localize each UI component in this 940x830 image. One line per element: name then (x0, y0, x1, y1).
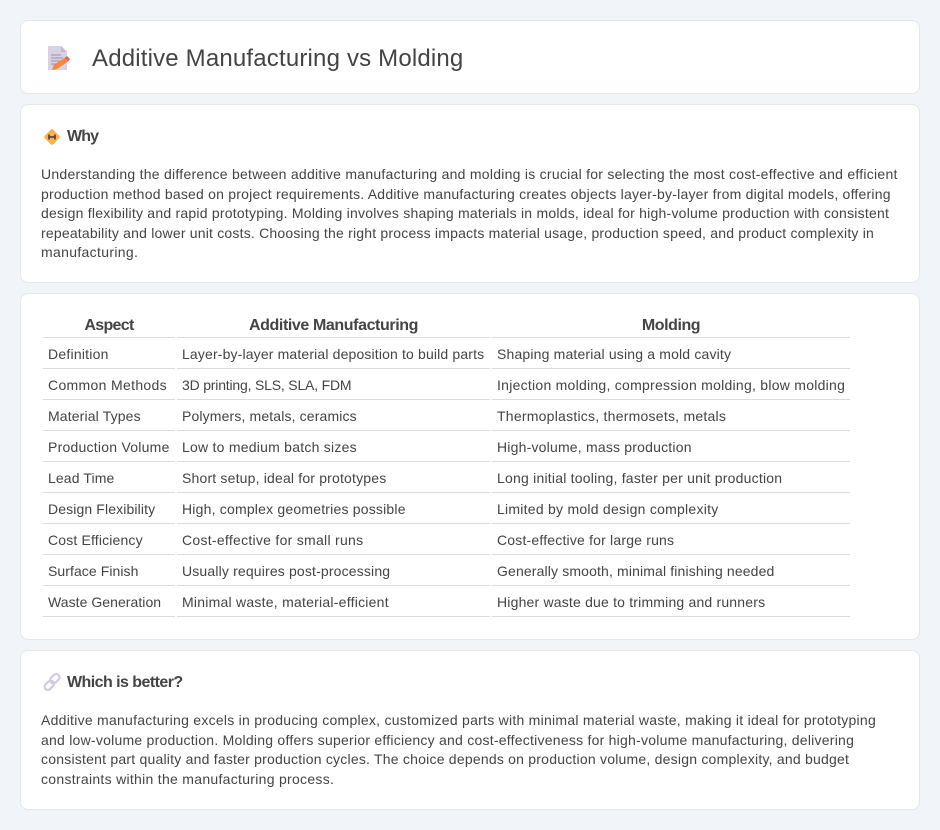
text block: why: design flexibility and rapid prototyping. Molding involves shaping materials in molds, ideal for high-volume production with consistent (41, 205, 889, 221)
comparison table: Surface Finish (48, 563, 138, 579)
title: Additive Manufacturing vs Molding (92, 45, 463, 72)
text block: why: repeatability and lower unit costs. Choosing the right process impacts material usage, production speed, and product complexity in (41, 225, 874, 241)
icon: chain link (44, 673, 60, 691)
text block: why: manufacturing. (41, 244, 138, 260)
comparison table: Design Flexibility (48, 501, 155, 517)
comparison table: Definition (48, 346, 109, 362)
comparison table: Production Volume (48, 439, 170, 455)
text block: why: Understanding the difference between additive manufacturing and molding is crucial for selecting the most cost-effective and efficient (41, 166, 898, 182)
icon: document with pencil (48, 46, 70, 70)
comparison table: Low to medium batch sizes (182, 439, 357, 455)
comparison table: Molding (642, 317, 700, 334)
comparison table: Additive Manufacturing (249, 317, 418, 334)
text block: why: production method based on project requirements. Additive manufacturing creates objects layer-by-layer from digital models, offering (41, 186, 891, 202)
text block: which is better: consistent part quality and faster production cycles. The choice depends on production volume, design complexity, and budget (41, 751, 849, 767)
comparison table: Thermoplastics, thermosets, metals (497, 408, 726, 424)
comparison table: Short setup, ideal for prototypes (182, 470, 386, 486)
comparison table: Lead Time (48, 470, 114, 486)
comparison table: High, complex geometries possible (182, 501, 406, 517)
comparison table: Generally smooth, minimal finishing needed (497, 563, 774, 579)
comparison table: Long initial tooling, faster per unit production (497, 470, 782, 486)
comparison table (43, 317, 850, 617)
text block: which is better: Additive manufacturing excels in producing complex, customized parts with minimal material waste, making it ideal for prototyping (41, 712, 876, 728)
text block: which is better: constraints within the manufacturing process. (41, 771, 334, 787)
text block: why (41, 166, 898, 260)
comparison table: Usually requires post-processing (182, 563, 390, 579)
comparison table: Minimal waste, material-efficient (182, 594, 389, 610)
comparison table: Cost-effective for small runs (182, 532, 363, 548)
text block: which is better (41, 712, 876, 787)
comparison table: Layer-by-layer material deposition to build parts (182, 346, 484, 362)
comparison table: Cost-effective for large runs (497, 532, 674, 548)
text block: which is better: and low-volume production. Molding offers superior efficiency and cost-effectiveness for high-volume manufacturing, delivering (41, 732, 854, 748)
comparison table: Shaping material using a mold cavity (497, 346, 731, 362)
comparison table: Material Types (48, 408, 141, 424)
panel: comparison table (20, 293, 920, 640)
comparison table: Limited by mold design complexity (497, 501, 718, 517)
comparison table: Higher waste due to trimming and runners (497, 594, 765, 610)
icon: warning diamond (44, 129, 60, 145)
comparison table: Waste Generation (48, 594, 161, 610)
comparison table: Injection molding, compression molding, blow molding (497, 377, 845, 393)
comparison table: 3D printing, SLS, SLA, FDM (182, 377, 351, 393)
panel: which is better (20, 650, 920, 810)
panel: title header (20, 20, 920, 94)
heading: why: Why (67, 128, 98, 145)
comparison table: Polymers, metals, ceramics (182, 408, 357, 424)
comparison table: Aspect (84, 317, 134, 334)
comparison table: Cost Efficiency (48, 532, 143, 548)
comparison table: High-volume, mass production (497, 439, 692, 455)
panel: why (20, 104, 920, 283)
comparison table: Common Methods (48, 377, 167, 393)
heading: which is better: Which is better? (67, 674, 183, 691)
